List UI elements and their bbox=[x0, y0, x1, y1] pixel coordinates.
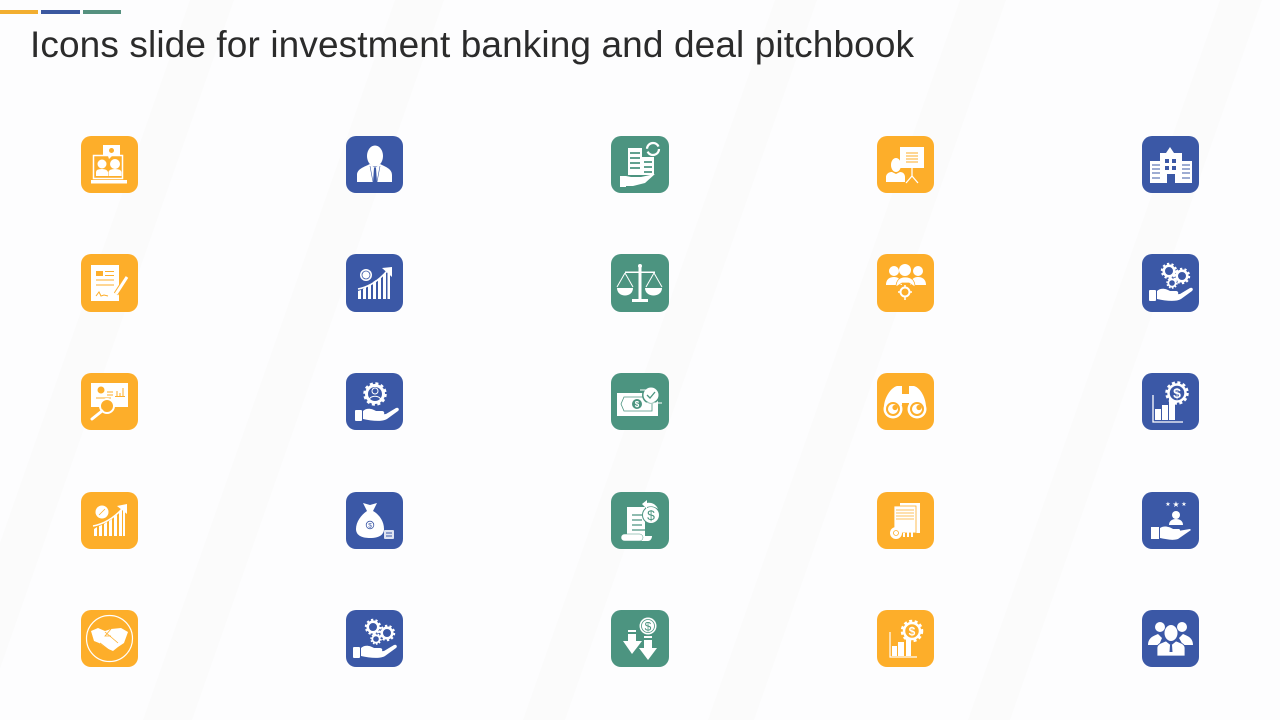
icon: growth chart with percent coin bbox=[346, 254, 403, 312]
icon: hand with rated person: ★ bbox=[1172, 500, 1180, 509]
icon: handshake in circle bbox=[81, 610, 138, 667]
icon: hand with rated person: ★ bbox=[1181, 501, 1187, 508]
icon: balance scale bbox=[611, 254, 669, 312]
icon: report documents bbox=[877, 492, 934, 549]
icon: growth chart orange bbox=[81, 492, 138, 549]
icon: money bag bbox=[346, 492, 403, 549]
icon: team with target bbox=[877, 254, 934, 312]
icon: signed document bbox=[81, 254, 138, 312]
icon: businessman bbox=[346, 136, 403, 193]
icon: chart with dollar gear orange bbox=[877, 610, 934, 667]
accent bars bbox=[0, 10, 121, 14]
title: Icons slide for investment banking and deal pitchbook bbox=[30, 24, 914, 65]
icon: scroll with dollar coin bbox=[611, 492, 669, 549]
icon: money with check bbox=[611, 373, 669, 430]
icon: down arrows with coin bbox=[611, 610, 669, 667]
icon: hand holding gears 2 bbox=[346, 610, 403, 667]
icon: hand with rated person: ★ bbox=[1165, 501, 1171, 508]
icon: hand with rated person bbox=[1142, 492, 1199, 549]
icon: scroll with dollar coin: $ bbox=[647, 507, 655, 523]
icon: building on hand bbox=[611, 136, 669, 193]
icon: business team bbox=[1142, 610, 1199, 667]
icon: money with check: $ bbox=[635, 400, 640, 409]
icon: presenter with board bbox=[877, 136, 934, 193]
icon: chart with dollar gear bbox=[1142, 373, 1199, 430]
icon: office building bbox=[1142, 136, 1199, 193]
icon: chart with dollar gear: $ bbox=[1173, 385, 1181, 401]
icon: down arrows with coin: $ bbox=[645, 620, 652, 634]
icon: monitor with magnifier bbox=[81, 373, 138, 430]
icon: hand holding gear with person bbox=[346, 373, 403, 430]
icon: laptop meeting bbox=[81, 136, 138, 193]
icon: money bag: $ bbox=[368, 522, 372, 530]
icon: binoculars bbox=[877, 373, 934, 430]
icon: hand holding gears bbox=[1142, 254, 1199, 312]
icon: chart with dollar gear orange: $ bbox=[909, 624, 916, 638]
